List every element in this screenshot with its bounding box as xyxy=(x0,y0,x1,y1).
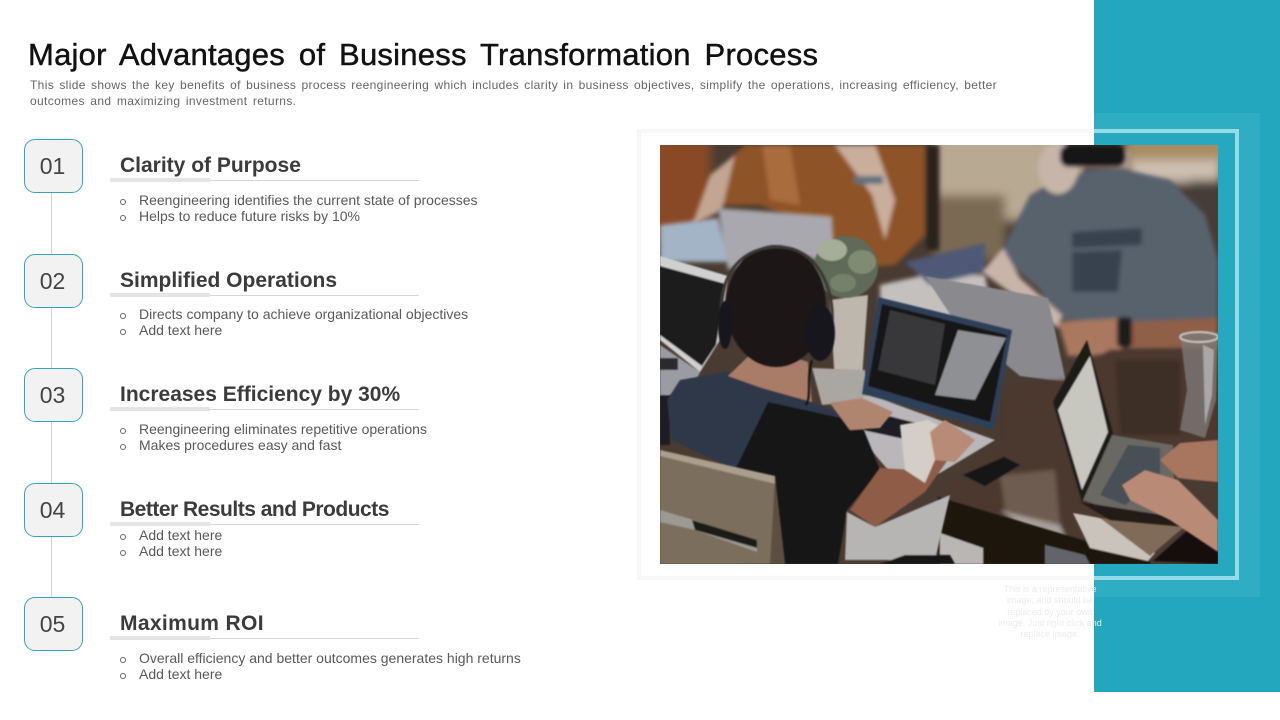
hands on keyboard xyxy=(1122,440,1218,552)
image placeholder note: image. Just right click and xyxy=(998,618,1102,628)
man in gray t-shirt xyxy=(982,142,1218,356)
bullet list 01: Reengineering identifies the current state of processes xyxy=(139,192,478,208)
bullet list 01: Helps to reduce future risks by 10% xyxy=(139,208,360,224)
head and headphones xyxy=(718,245,835,405)
blurred background xyxy=(640,130,1240,580)
person in orange sweater xyxy=(692,145,939,268)
description: This slide shows the key benefits of business process reengineering which includes clarity in business objectives, simplify the operations, increasing efficiency, better xyxy=(30,78,997,92)
image frame on white area xyxy=(637,129,1094,580)
item 04: better results and products xyxy=(24,483,419,559)
number badge 02: 02 xyxy=(40,268,65,294)
heading 04: Better Results and Products xyxy=(120,498,389,521)
bullet list 02 xyxy=(120,306,468,338)
image placeholder note: This is a representative xyxy=(1003,584,1097,594)
number badge 04 xyxy=(24,483,83,537)
man with headphones: navy t-shirt xyxy=(667,345,975,564)
image placeholder note: replaced by your own xyxy=(1007,607,1093,617)
number badge 02 xyxy=(24,254,83,308)
title: Major Advantages of Business Transformation Process xyxy=(28,37,818,72)
bullet list 05: Add text here xyxy=(139,666,222,682)
number badge 03 xyxy=(24,368,83,422)
wooden chair xyxy=(660,450,785,564)
item 02: simplified operations xyxy=(24,254,468,338)
bullet list 04: Add text here xyxy=(139,543,222,559)
heading 02: Simplified Operations xyxy=(120,269,337,292)
number badge 01 xyxy=(24,139,83,193)
number badge 03: 03 xyxy=(40,382,65,408)
wooden table xyxy=(940,348,1218,560)
heading 01: Clarity of Purpose xyxy=(120,154,301,177)
connector line 2 xyxy=(51,307,52,368)
heading 05: Maximum ROI xyxy=(120,612,264,635)
center laptop xyxy=(835,297,1012,478)
heading 03: Increases Efficiency by 30% xyxy=(120,383,400,406)
item 03: increases efficiency xyxy=(24,368,427,453)
bullet list 03 xyxy=(120,421,427,453)
bullet list 04 xyxy=(120,527,222,559)
light translucent square behind image xyxy=(1094,113,1260,597)
connector line 3 xyxy=(51,422,52,483)
image placeholder note: image, and should be xyxy=(1007,595,1093,605)
bullet list 03: Makes procedures easy and fast xyxy=(139,437,341,453)
phone xyxy=(963,457,1020,486)
photo: team working on laptops xyxy=(660,145,1218,564)
drinking glass xyxy=(1180,332,1218,438)
number badge 05: 05 xyxy=(40,611,65,637)
gray laptop lid xyxy=(925,276,1066,382)
item 01: clarity of purpose xyxy=(24,139,478,224)
image frame on teal area xyxy=(1094,129,1239,580)
bullet list 03: Reengineering eliminates repetitive operations xyxy=(139,421,427,437)
bullet list 05: Overall efficiency and better outcomes generates high returns xyxy=(139,650,521,666)
number badge 01: 01 xyxy=(40,153,65,179)
bullet list 05 xyxy=(120,650,521,682)
bullet list 02: Add text here xyxy=(139,322,222,338)
bullet list 01 xyxy=(120,192,478,224)
right laptop xyxy=(1053,340,1185,527)
connector line 1 xyxy=(51,193,52,254)
number badge 05 xyxy=(24,597,83,651)
under-table area xyxy=(938,497,1218,564)
image placeholder note: replace image. xyxy=(1020,629,1080,639)
left dark laptop xyxy=(660,256,728,445)
bullet list 02: Directs company to achieve organizational objectives xyxy=(139,306,468,322)
description: outcomes and maximizing investment returns. xyxy=(30,94,296,108)
image placeholder note xyxy=(998,584,1102,639)
connector line 4 xyxy=(51,536,52,597)
teal side panel xyxy=(1094,0,1280,692)
plant and vase xyxy=(812,236,878,405)
bullet list 04: Add text here xyxy=(139,527,222,543)
white table and blurred silver laptop xyxy=(660,208,1000,360)
item 05: maximum ROI xyxy=(24,597,521,682)
number badge 04: 04 xyxy=(40,497,65,523)
description xyxy=(30,78,997,108)
